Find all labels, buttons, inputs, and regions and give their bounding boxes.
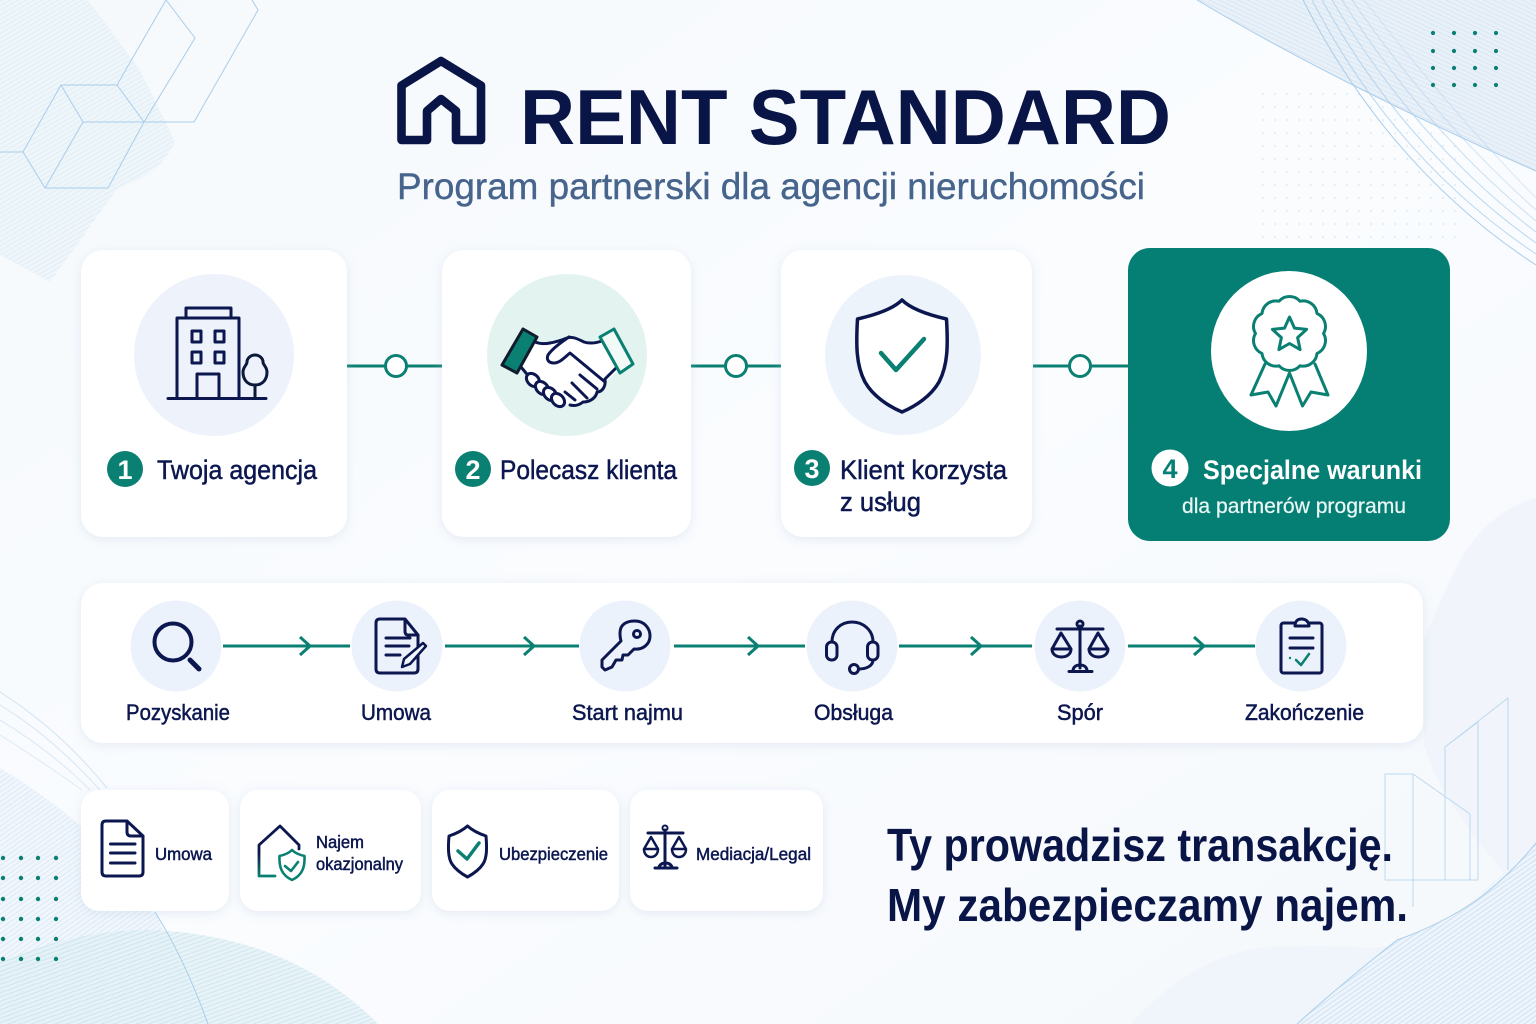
stage: Umowa: Umowa (361, 700, 432, 725)
card: Umowa: Umowa (155, 844, 212, 864)
step label: Polecasz klienta (500, 455, 678, 485)
step number 1 (107, 451, 143, 487)
stage: Obsługa: Obsługa (814, 700, 894, 725)
step number 3 (794, 450, 830, 486)
card: Ubezpieczenie (432, 790, 619, 911)
step label: Specjalne warunki (1203, 455, 1422, 485)
step number 2 (455, 451, 491, 487)
stage: Spór: Spór (1057, 700, 1103, 725)
step sublabel: dla partnerów programu (1182, 495, 1406, 518)
step number 4 (1152, 450, 1188, 486)
background decoration: bottom left waves (0, 692, 378, 1024)
step number 4: 4 (1162, 454, 1178, 484)
step number 2: 2 (465, 455, 481, 485)
background decoration: top left cubes (0, 0, 258, 282)
arrow 3 (674, 637, 805, 655)
card: Umowa (81, 790, 229, 911)
icon: office building with tree (168, 308, 267, 398)
card: Najem okazjonalny: okazjonalny (316, 854, 403, 874)
icon: award rosette with star (1251, 296, 1328, 406)
tagline line 2: My zabezpieczamy najem. (887, 879, 1408, 931)
panel: step 3 (781, 250, 1032, 537)
connector: step 1 to 2 (347, 356, 442, 376)
step label: Klient korzysta (840, 455, 1008, 485)
step number 1: 1 (117, 455, 133, 485)
card: Ubezpieczenie: Ubezpieczenie (499, 844, 608, 864)
card: Najem okazjonalny: Najem (316, 832, 364, 852)
stage: Zakończenie (1245, 600, 1364, 725)
stage: Umowa (352, 600, 442, 725)
connector: step 2 to 3 (691, 356, 781, 376)
arrow 5 (1128, 637, 1255, 655)
panel: process timeline (81, 583, 1423, 743)
title: RENT STANDARD (520, 73, 1171, 161)
stage: Spór (1034, 600, 1126, 725)
card: Mediacja/Legal (630, 790, 823, 911)
step number 3: 3 (804, 454, 820, 484)
logo: house (402, 61, 481, 140)
stage: Zakończenie: Zakończenie (1245, 700, 1364, 725)
stage: Obsługa (806, 600, 898, 725)
background decoration: top right teal dots (1431, 31, 1498, 87)
arrow 2 (445, 637, 579, 655)
background decoration: top right waves and dots (1197, 0, 1536, 265)
icon: handshake (502, 329, 633, 409)
arrow 1 (223, 637, 350, 655)
stage: Start najmu (572, 600, 683, 725)
icon: shield with check (857, 300, 947, 412)
card: Mediacja/Legal: Mediacja/Legal (696, 844, 811, 864)
stage: Pozyskanie (126, 600, 230, 725)
panel: step 2 (442, 250, 691, 537)
step label: Twoja agencja (157, 455, 318, 485)
stage: Pozyskanie: Pozyskanie (126, 700, 230, 725)
card: Najem okazjonalny (240, 790, 421, 911)
step label second line: z usług (840, 487, 921, 517)
arrow 4 (899, 637, 1032, 655)
tagline (887, 819, 1408, 931)
subtitle: Program partnerski dla agencji nieruchomości (397, 166, 1145, 207)
panel: step 1 (81, 250, 347, 537)
panel: step 4 highlighted (1128, 248, 1450, 541)
connector: step 3 to 4 (1033, 356, 1128, 376)
background decoration: bottom right skyline and waves (1130, 498, 1536, 1024)
tagline line 1: Ty prowadzisz transakcję. (887, 819, 1393, 871)
stage: Start najmu: Start najmu (572, 700, 683, 725)
background decoration: bottom left teal dots (1, 856, 58, 961)
